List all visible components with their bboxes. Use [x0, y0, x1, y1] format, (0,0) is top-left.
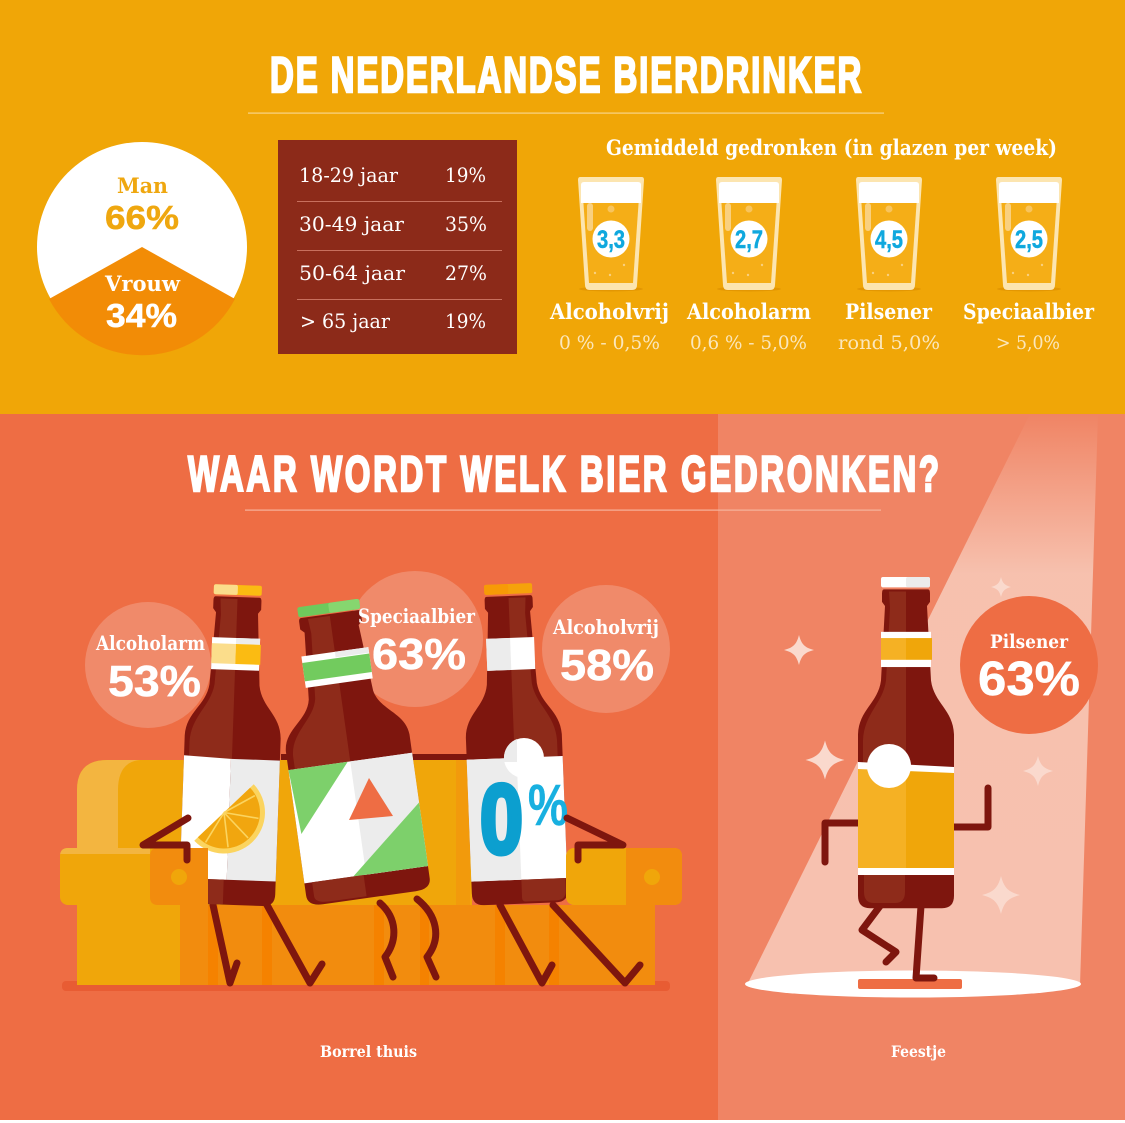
- row 30-49: [299, 212, 487, 236]
- title: waar wordt welk bier gedronken: WAAR WORDT WELK BIER GEDRONKEN?: [188, 446, 939, 502]
- row 18-29: 19%: [445, 163, 486, 187]
- glass: alcoholvrij: Alcoholvrij: [549, 299, 669, 324]
- bubble text: alcoholarm: 53%: [108, 657, 201, 706]
- row 50-64: [299, 261, 487, 285]
- glass: alcoholvrij: [549, 177, 669, 354]
- row 30-49: 30-49 jaar: [299, 212, 404, 236]
- glass: speciaalbier: 2,5: [1015, 226, 1043, 254]
- title underline: [248, 112, 884, 114]
- row 50-64: 50-64 jaar: [299, 261, 405, 285]
- bubble: pilsener: Pilsener: [990, 631, 1069, 653]
- spotlight beam: [747, 414, 1098, 985]
- legs: bottle alcoholvrij: [500, 905, 640, 983]
- row 50-64: 27%: [445, 261, 487, 285]
- bottle: alcoholarm: [179, 583, 286, 906]
- glass: pilsener: rond 5,0%: [838, 332, 940, 354]
- row 65+: [300, 309, 486, 333]
- legs: bottle pilsener: [862, 906, 934, 978]
- label: vrouw: Vrouw: [104, 271, 181, 296]
- legs: bottle speciaalbier: [380, 899, 436, 977]
- glass: speciaalbier: [963, 177, 1095, 354]
- row 18-29: 18-29 jaar: [299, 163, 398, 187]
- bubble: pilsener: 63%: [978, 653, 1080, 706]
- label: 0%: [480, 764, 568, 874]
- sparkles: [784, 577, 1053, 914]
- glass: alcoholarm: Alcoholarm: [686, 299, 811, 324]
- illustration: sofa seat: [62, 905, 670, 991]
- panel: borrel thuis background: [0, 414, 718, 1120]
- glass: alcoholvrij: 3,3: [597, 226, 625, 254]
- bubble: alcoholvrij background: [542, 585, 670, 713]
- bubble text: speciaalbier: [358, 604, 475, 679]
- caption: borrel thuis: Borrel thuis: [320, 1042, 417, 1061]
- label: vrouw: 34%: [106, 297, 177, 334]
- bubble text: alcoholvrij: Alcoholvrij: [552, 615, 659, 639]
- arm: bottle alcoholvrij: [567, 818, 623, 860]
- spotlight floor: [745, 970, 1081, 998]
- glass: alcoholvrij: 0 % - 0,5%: [559, 332, 660, 354]
- title underline: [245, 510, 881, 511]
- label: man: [105, 173, 179, 236]
- glass: alcoholarm: [686, 177, 811, 354]
- label: 0%: %: [528, 773, 568, 838]
- caption: feestje: Feestje: [891, 1042, 946, 1061]
- bubble: pilsener: [960, 596, 1098, 734]
- pie chart: man vs vrouw: [37, 142, 247, 355]
- row 65+: 19%: [445, 309, 486, 333]
- platform: [858, 979, 962, 989]
- title: De Nederlandse bierdrinker: DE NEDERLANDSE BIERDRINKER: [270, 47, 861, 103]
- glass: speciaalbier: Speciaalbier: [963, 299, 1095, 324]
- panel: feestje background: [718, 414, 1125, 1120]
- bubble text: alcoholvrij: [552, 615, 659, 690]
- glass: speciaalbier: > 5,0%: [996, 332, 1060, 354]
- row 65+: > 65 jaar: [300, 309, 390, 333]
- label: man: 66%: [105, 199, 179, 236]
- illustration: left armrest: [60, 848, 208, 985]
- bubble text: alcoholvrij: 58%: [560, 641, 654, 690]
- bottle: speciaalbier: [266, 594, 431, 906]
- glass: alcoholarm: 2,7: [735, 226, 763, 254]
- bubble text: alcoholarm: Alcoholarm: [95, 631, 205, 655]
- glass: pilsener: [838, 177, 940, 354]
- table: leeftijd: [278, 140, 517, 354]
- arm: bottle alcoholarm: [143, 818, 188, 860]
- label: man: Man: [117, 173, 168, 198]
- legs: bottle alcoholarm: [213, 905, 322, 983]
- bottle: pilsener: [858, 577, 954, 908]
- panel: top background: [0, 0, 1125, 414]
- label: 0%: 0: [480, 764, 523, 874]
- label: vrouw: [104, 271, 181, 334]
- bubble text: speciaalbier: Speciaalbier: [358, 604, 475, 628]
- glass: pilsener: Pilsener: [845, 299, 933, 324]
- bubble: alcoholarm background: [85, 602, 211, 728]
- arms: bottle pilsener: [825, 788, 988, 862]
- bubble: speciaalbier background: [347, 571, 483, 707]
- bubble text: alcoholarm: [95, 631, 205, 706]
- bubble text: speciaalbier: 63%: [372, 630, 466, 679]
- illustration: sofa back: [77, 754, 472, 905]
- heading: gemiddeld gedronken: Gemiddeld gedronken (in glazen per week): [606, 135, 1057, 160]
- glass: pilsener: 4,5: [875, 226, 903, 254]
- bottle: alcoholvrij: [460, 582, 568, 906]
- glass: alcoholarm: 0,6 % - 5,0%: [690, 332, 807, 354]
- row 18-29: [299, 163, 486, 187]
- icon: orange slice: [194, 784, 282, 870]
- row 30-49: 35%: [445, 212, 487, 236]
- illustration: right armrest: [566, 848, 682, 905]
